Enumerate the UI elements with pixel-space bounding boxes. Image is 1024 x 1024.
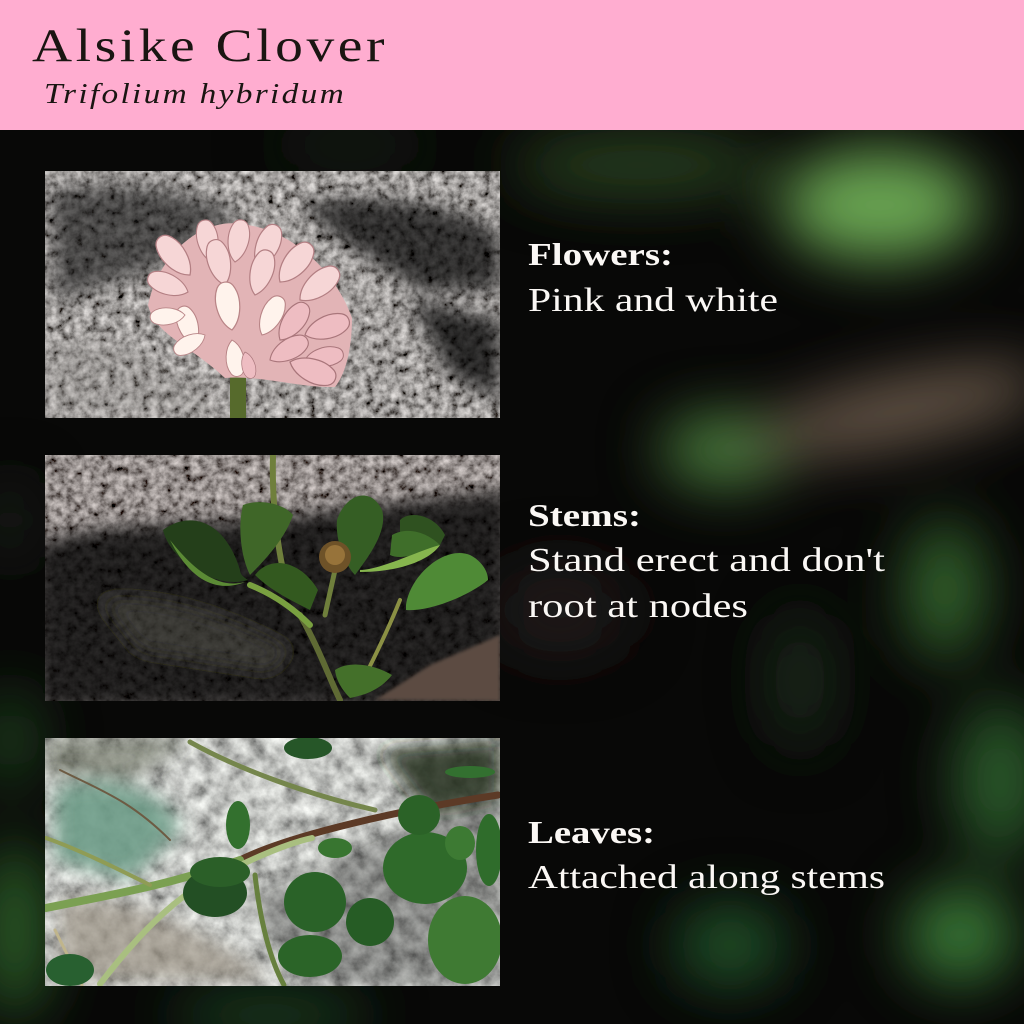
leaflets bbox=[46, 737, 502, 986]
photo: flower bbox=[45, 171, 500, 420]
flower head bbox=[145, 218, 353, 390]
seed head bbox=[319, 541, 351, 573]
title: Alsike Clover bbox=[32, 20, 388, 72]
photo: stems bbox=[35, 455, 510, 710]
photo: leaves bbox=[45, 737, 502, 986]
subtitle: Trifolium hybridum bbox=[44, 78, 346, 110]
caption: leaves: Attached along stems bbox=[528, 859, 885, 896]
caption: flowers: Pink and white bbox=[528, 282, 778, 319]
caption: stems: Stems: bbox=[528, 497, 641, 533]
plant bbox=[163, 456, 488, 700]
rock highlight bbox=[375, 635, 500, 701]
caption: stems bbox=[528, 497, 886, 625]
caption: flowers: Flowers: bbox=[528, 236, 673, 272]
caption: stems: Stand erect and don't bbox=[528, 542, 886, 579]
caption: stems: root at nodes bbox=[528, 588, 748, 625]
flower stem bbox=[230, 378, 246, 418]
header band bbox=[0, 0, 1024, 130]
caption: leaves: Leaves: bbox=[528, 814, 655, 850]
caption: flowers bbox=[528, 236, 778, 319]
caption: leaves bbox=[528, 814, 885, 896]
